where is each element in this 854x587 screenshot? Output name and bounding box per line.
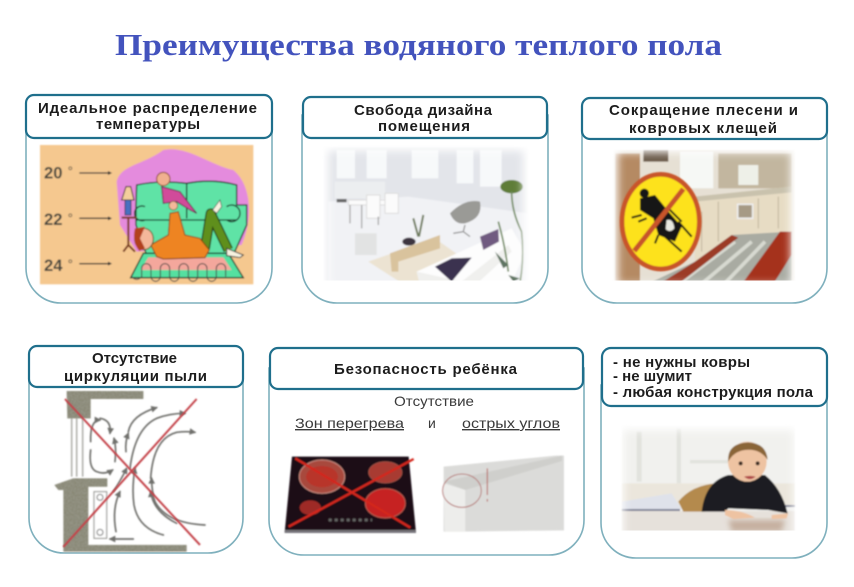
photo: crossed-out cooktop	[285, 457, 416, 533]
header: ideal temperature	[26, 95, 272, 138]
temperature labels: °	[68, 256, 73, 271]
header: mold and mites: ковровых клещей	[629, 120, 777, 137]
header: child safety: Безопасность ребёнка	[334, 361, 518, 378]
header: ideal temperature: температуры	[96, 116, 200, 133]
header: list of benefits: - не шумит	[613, 368, 692, 385]
header: design freedom	[303, 97, 547, 138]
panel: other benefits with baby	[601, 348, 827, 558]
temperature labels	[44, 163, 112, 275]
photo: white living room	[326, 148, 526, 280]
header: mold and mites: Сокращение плесени и	[609, 102, 798, 119]
header: no dust circulation	[29, 346, 243, 387]
subheading: absence of: Отсутствие	[394, 393, 474, 409]
panel: design freedom	[302, 97, 548, 303]
temperature labels: °	[68, 210, 73, 225]
temperature labels: 24	[44, 256, 63, 275]
title: Преимущества водяного теплого пола	[115, 27, 723, 62]
panel: mold and mites reduction	[582, 98, 827, 303]
header: design freedom: Свобода дизайна	[354, 102, 493, 119]
header: list of benefits: - любая конструкция пола	[613, 384, 814, 401]
header: no dust circulation: Отсутствие	[92, 350, 177, 367]
panel: child safety	[269, 348, 584, 555]
diagram: crossed-out dust circulation	[54, 391, 205, 552]
header: child safety	[270, 348, 583, 389]
photo: radiator with sharp corner	[443, 456, 564, 532]
icon: prohibited beetle sign	[622, 174, 699, 269]
airflow arrows	[90, 408, 205, 539]
label: overheating zones and sharp corners: острых углов	[462, 415, 560, 431]
temperature labels: 20	[44, 163, 63, 182]
temperature labels: °	[68, 164, 73, 179]
label: overheating zones and sharp corners	[295, 415, 560, 431]
header: design freedom: помещения	[378, 118, 470, 135]
illustration: family on heated floor with temperatures	[40, 145, 253, 284]
panel: ideal temperature distribution	[26, 95, 272, 303]
panel: no dust circulation	[29, 346, 243, 553]
header: no dust circulation: циркуляции пыли	[64, 368, 207, 385]
temperature labels: 22	[44, 210, 63, 229]
header: mold and mites	[582, 98, 827, 139]
photo: baby on warm floor	[621, 428, 796, 530]
photo: kitchen	[613, 150, 795, 288]
header: list of benefits	[602, 348, 827, 406]
label: overheating zones and sharp corners: Зон перегрева	[295, 415, 404, 431]
label: overheating zones and sharp corners: и	[428, 415, 436, 431]
header: list of benefits: - не нужны ковры	[613, 354, 750, 371]
header: ideal temperature: Идеальное распределение	[38, 100, 257, 117]
